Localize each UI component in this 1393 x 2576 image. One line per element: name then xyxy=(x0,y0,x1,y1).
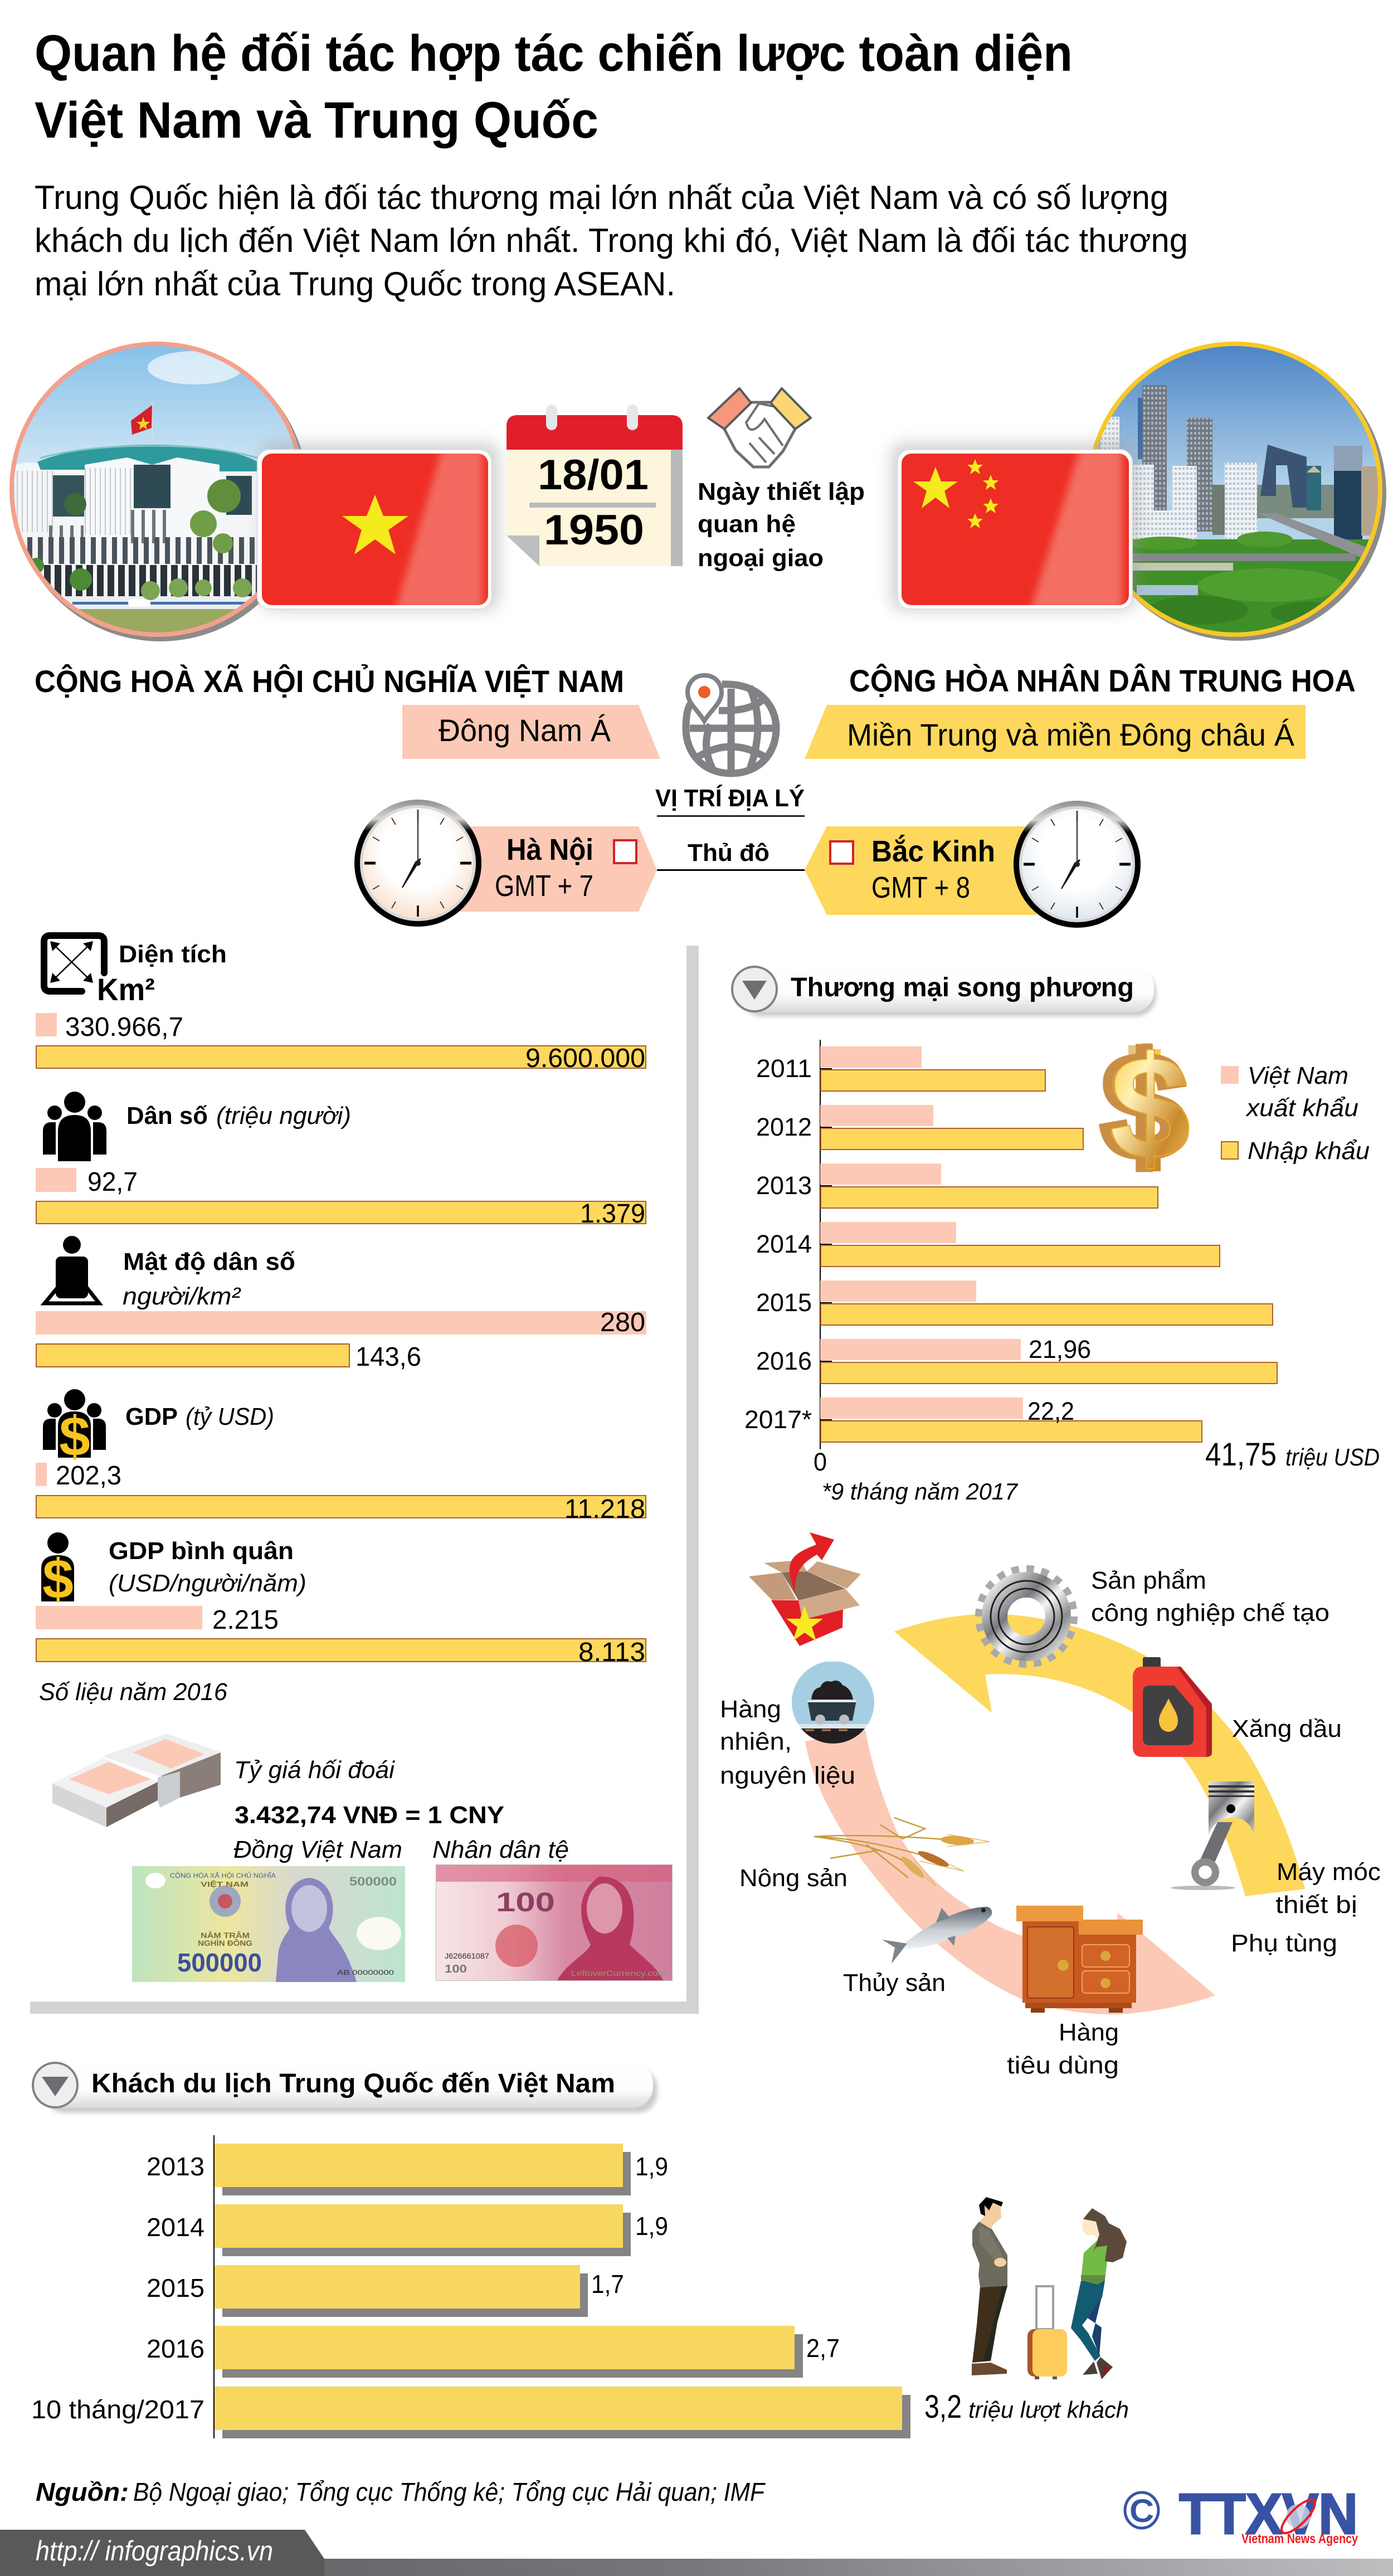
stat: population xyxy=(36,1102,646,1229)
icon: fish xyxy=(882,1907,992,1964)
note: data year: Số liệu năm 2016 xyxy=(39,1678,228,1706)
label: fuel and raw materials xyxy=(720,1696,855,1789)
bar chart: bilateral trade: 2013 xyxy=(756,1171,812,1200)
illustration: travellers with suitcase xyxy=(972,2197,1127,2379)
bar chart: tourists: 10 tháng/2017 xyxy=(31,2395,204,2424)
heading: Vietnam: CỘNG HOÀ XÃ HỘI CHỦ NGHĨA VIỆT NAM xyxy=(35,664,624,699)
stat: population density: Mật độ dân số xyxy=(123,1248,295,1275)
banknote: Chinese yuan xyxy=(436,1864,672,1980)
icon: GDP: $ xyxy=(59,1405,90,1468)
label: fuel and raw materials: nguyên liệu xyxy=(720,1762,855,1789)
diplomatic relations label: quan hệ xyxy=(698,510,796,538)
stat: area xyxy=(36,941,646,1073)
bar chart: tourists: triệu lượt khách xyxy=(968,2397,1129,2423)
source: Nguồn: xyxy=(36,2477,129,2506)
arrow: imports (yellow arc) xyxy=(894,1614,1305,1896)
intro paragraph: khách du lịch đến Việt Nam lớn nhất. Trong khi đó, Việt Nam là đối tác thương xyxy=(35,222,1188,259)
icon: gold dollar sign: $ xyxy=(1102,1025,1186,1188)
stat: GDP: 11.218 xyxy=(564,1494,645,1524)
bar chart: tourists: 3,2 xyxy=(924,2389,962,2425)
stat: population density: 280 xyxy=(600,1308,645,1337)
banknote: Vietnam dong: VIỆT NAM xyxy=(201,1880,249,1888)
photo: Vietnam National Assembly building xyxy=(6,342,308,642)
tag: Hanoi capital: GMT + 7 xyxy=(495,869,593,903)
stat: GDP xyxy=(36,1403,646,1524)
bar chart: bilateral trade: *9 tháng năm 2017 xyxy=(822,1478,1019,1504)
icon: handshake xyxy=(708,388,811,467)
stat: population density xyxy=(36,1248,646,1372)
stat: population density: người/km² xyxy=(123,1283,241,1310)
label: manufactured products: công nghiệp chế tạo xyxy=(1091,1599,1329,1627)
heading pill: bilateral trade xyxy=(732,966,1156,1016)
tag: Beijing capital xyxy=(805,826,1036,915)
man xyxy=(972,2197,1007,2375)
heading: China: CỘNG HÒA NHÂN DÂN TRUNG HOA xyxy=(849,663,1356,698)
stat: population: 92,7 xyxy=(87,1167,138,1197)
suitcase xyxy=(1027,2286,1067,2379)
bar chart: bilateral trade: 2016 xyxy=(756,1347,812,1375)
diplomatic relations label xyxy=(698,478,865,572)
logo: TTXVN: Vietnam News Agency xyxy=(1241,2531,1358,2546)
icon: gold dollar sign: $ xyxy=(1109,1026,1191,1189)
intro paragraph xyxy=(35,179,1188,303)
bar chart: tourists: 2016 xyxy=(147,2334,204,2363)
flag: Vietnam xyxy=(257,443,499,610)
bar chart: tourists: 1,9 xyxy=(635,2152,668,2181)
bar chart: bilateral trade: 2017* xyxy=(744,1405,812,1434)
tag: China location xyxy=(805,705,1306,759)
label: agricultural products: Nông sản xyxy=(739,1864,848,1892)
bar chart: bilateral trade xyxy=(744,1040,1380,1504)
stat: population: Dân số xyxy=(126,1102,208,1129)
icon: stack of banknotes xyxy=(52,1734,221,1827)
title: Quan hệ đối tác hợp tác chiến lược toàn diện xyxy=(35,25,1073,82)
icon: cabinet xyxy=(1016,1906,1143,2013)
label: consumer goods: tiêu dùng xyxy=(1007,2052,1119,2079)
arrow: exports (pink arc) xyxy=(805,1730,1215,2014)
stat: GDP per capita: GDP bình quân xyxy=(109,1537,294,1565)
label: capital xyxy=(657,839,805,871)
bar chart: bilateral trade: 0 xyxy=(814,1448,827,1476)
bar chart: bilateral trade: 21,96 xyxy=(1029,1335,1091,1364)
title xyxy=(35,25,1073,149)
calendar: 18/01/1950 xyxy=(506,405,683,566)
logo: TTXVN: C xyxy=(1129,2493,1154,2529)
footer band with website xyxy=(0,2530,1393,2576)
icon: globe with location pin xyxy=(686,675,776,773)
icon: area xyxy=(44,936,104,991)
tag: Vietnam location: Đông Nam Á xyxy=(439,713,611,748)
label: consumer goods: Hàng xyxy=(1059,2019,1119,2046)
legend: trade: Nhập khẩu xyxy=(1248,1137,1370,1165)
label: geographic location: VỊ TRÍ ĐỊA LÝ xyxy=(655,784,805,812)
icon: GDP xyxy=(43,1389,106,1468)
bar chart: bilateral trade: 2014 xyxy=(756,1230,812,1258)
banknote: Vietnam dong: NĂM TRĂM xyxy=(201,1931,250,1940)
label: machinery and parts: Máy móc xyxy=(1277,1858,1381,1886)
tag: Beijing capital: Bắc Kinh xyxy=(871,835,995,868)
banknote: Chinese yuan: 100 xyxy=(496,1888,555,1917)
stat: GDP per capita: 2.215 xyxy=(212,1605,279,1635)
bar chart: tourists: 2,7 xyxy=(806,2334,840,2363)
banknote: Vietnam dong: 500000 xyxy=(177,1948,262,1977)
icon: wheat xyxy=(814,1818,990,1886)
stat: area: 9.600.000 xyxy=(525,1044,645,1073)
intro paragraph: Trung Quốc hiện là đối tác thương mại lớn nhất của Việt Nam và có số lượng xyxy=(35,179,1168,216)
panel frame: comparison xyxy=(30,946,699,2014)
title: Việt Nam và Trung Quốc xyxy=(35,92,598,149)
exchange rate: 3.432,74 VNĐ = 1 CNY xyxy=(235,1801,504,1829)
label: petroleum: Xăng dầu xyxy=(1232,1715,1342,1742)
bar chart: bilateral trade: 22,2 xyxy=(1027,1397,1074,1425)
label: machinery and parts: Phụ tùng xyxy=(1231,1930,1337,1957)
stat: GDP per capita xyxy=(36,1537,646,1667)
bar chart: tourists: 2014 xyxy=(147,2213,204,2242)
legend: trade: xuất khẩu xyxy=(1245,1094,1358,1122)
icon: piston xyxy=(1171,1781,1254,1890)
icon: gear xyxy=(980,1570,1073,1663)
stat: GDP: (tỷ USD) xyxy=(186,1403,274,1430)
bar chart: tourists: 2015 xyxy=(147,2273,204,2302)
banknote: Vietnam dong xyxy=(132,1866,405,1982)
diplomatic relations label: ngoại giao xyxy=(698,544,824,572)
stat: area: Km² xyxy=(97,972,155,1007)
banknote: Vietnam dong: NGHÌN ĐỒNG xyxy=(198,1938,252,1947)
flag: China xyxy=(892,443,1137,610)
stat: population: (triệu người) xyxy=(216,1102,351,1129)
label: capital: Thủ đô xyxy=(688,839,769,866)
stat: GDP per capita: 8.113 xyxy=(578,1638,645,1667)
label: fuel and raw materials: Hàng xyxy=(720,1696,781,1723)
label: seafood: Thủy sản xyxy=(843,1969,946,1996)
tag: Hanoi capital: Hà Nội xyxy=(506,833,593,866)
stat: population: 1.379 xyxy=(580,1199,645,1229)
exchange rate: Tỷ giá hối đoái xyxy=(234,1756,395,1784)
bar chart: bilateral trade: 41,75 xyxy=(1205,1436,1277,1473)
calendar: 18/01/1950: 1950 xyxy=(544,507,644,554)
heading pill: Chinese tourists xyxy=(33,2062,657,2113)
icon: GDP per capita: $ xyxy=(42,1548,74,1610)
bar chart: bilateral trade: 2011 xyxy=(756,1054,812,1083)
label: consumer goods xyxy=(1007,2019,1119,2079)
label: machinery and parts: thiết bị xyxy=(1275,1891,1357,1918)
woman xyxy=(1071,2208,1127,2379)
logo: TTXVN: TTXVN xyxy=(1179,2482,1358,2546)
stat: GDP: GDP xyxy=(125,1403,178,1430)
banknote: Chinese yuan: LeftoverCurrency.com xyxy=(571,1969,666,1978)
exchange rate: Đồng Việt Nam xyxy=(233,1836,402,1863)
source: Bộ Ngoại giao; Tổng cục Thống kê; Tổng cục Hải quan; IMF xyxy=(133,2477,766,2506)
bar chart: tourists: 1,9 xyxy=(635,2212,668,2241)
icon: coal cart xyxy=(792,1662,874,1745)
photo: Beijing skyline xyxy=(1087,342,1386,645)
legend: trade: Việt Nam xyxy=(1248,1062,1348,1089)
stat: GDP per capita: (USD/người/năm) xyxy=(109,1570,306,1597)
heading pill: Chinese tourists: Khách du lịch Trung Quốc đến Việt Nam xyxy=(91,2069,615,2098)
icon: population xyxy=(43,1092,106,1161)
exchange rate: Nhân dân tệ xyxy=(432,1836,569,1863)
icon: clock Hanoi xyxy=(354,800,481,927)
legend: trade xyxy=(1221,1062,1370,1165)
bar chart: tourists xyxy=(31,2135,1129,2438)
banknote: Vietnam dong: 500000 xyxy=(349,1874,397,1888)
banknote: Vietnam dong: CỘNG HÒA XÃ HỘI CHỦ NGHĨA xyxy=(170,1871,276,1879)
tag: Beijing capital: GMT + 8 xyxy=(871,871,970,904)
calendar: 18/01/1950: 18/01 xyxy=(538,451,649,499)
tag: China location: Miền Trung và miền Đông châu Á xyxy=(847,717,1295,752)
tag: Vietnam location xyxy=(402,705,660,759)
bar chart: tourists: 1,7 xyxy=(591,2270,624,2299)
label: manufactured products xyxy=(1091,1567,1329,1627)
intro paragraph: mại lớn nhất của Trung Quốc trong ASEAN. xyxy=(35,265,675,303)
stat: population density: 143,6 xyxy=(355,1342,421,1372)
icon: clock Beijing xyxy=(1014,801,1141,928)
banknote: Chinese yuan: 100 xyxy=(445,1963,467,1975)
icon: oil can xyxy=(1133,1657,1212,1757)
label: manufactured products: Sản phẩm xyxy=(1091,1567,1206,1594)
banknote: Chinese yuan: J626661087 xyxy=(445,1951,489,1960)
label: fuel and raw materials: nhiên, xyxy=(720,1728,792,1755)
heading pill: bilateral trade: Thương mại song phương xyxy=(791,973,1134,1002)
bar chart: bilateral trade: 2015 xyxy=(756,1288,812,1317)
icon: export box xyxy=(749,1532,861,1646)
banknote: Vietnam dong: AB 00000000 xyxy=(337,1969,394,1976)
stat: area: Diện tích xyxy=(119,941,227,968)
tag: Hanoi capital xyxy=(423,826,657,912)
bar chart: bilateral trade: 2012 xyxy=(756,1113,812,1141)
exchange rate xyxy=(233,1756,569,1863)
label: machinery and parts xyxy=(1231,1858,1381,1957)
icon: population density xyxy=(45,1236,99,1303)
stat: area: 330.966,7 xyxy=(65,1012,183,1042)
diplomatic relations label: Ngày thiết lập xyxy=(698,478,865,505)
footer band with website: http:// infographics.vn xyxy=(36,2535,273,2567)
stat: GDP: 202,3 xyxy=(56,1461,121,1491)
bar chart: tourists: 2013 xyxy=(147,2152,204,2181)
bar chart: bilateral trade: triệu USD xyxy=(1285,1444,1380,1471)
